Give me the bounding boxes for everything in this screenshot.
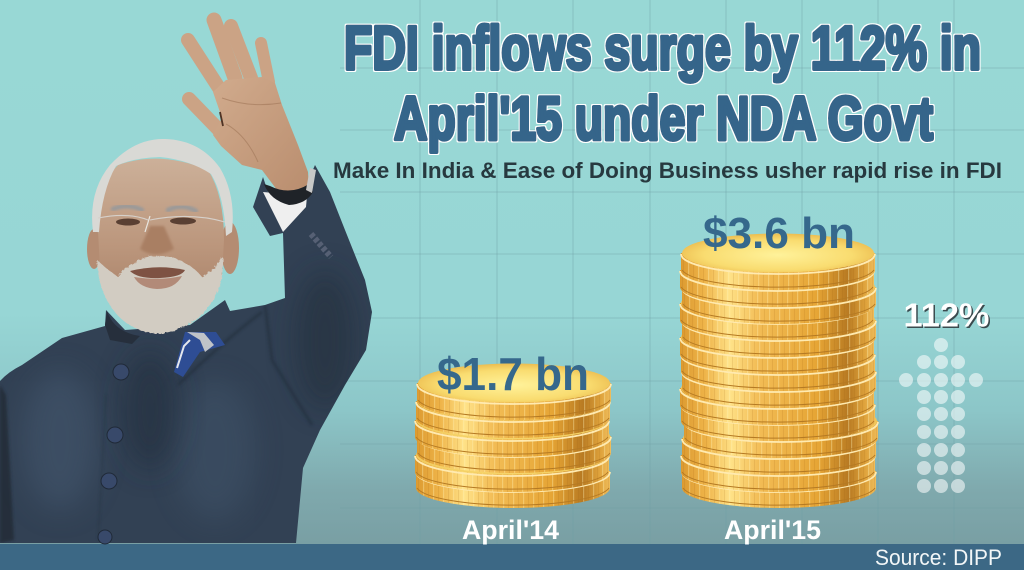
face [98, 159, 224, 320]
icon: dotted up arrow [899, 338, 983, 493]
axis label April'14: April'14 [462, 515, 559, 545]
footer band [0, 544, 1024, 570]
shirt cuff [263, 192, 307, 232]
person: waving leader [0, 20, 372, 544]
growth percentage: 112% [905, 298, 991, 335]
value label 1.7 bn: $1.7 bn [437, 348, 589, 400]
coin stack: April'15 [680, 234, 878, 508]
axis label April'15: April'15 [724, 515, 821, 545]
ears [87, 222, 239, 274]
eyes and brows [98, 206, 225, 232]
subtitle: Make In India & Ease of Doing Business usher rapid rise in FDI [333, 158, 1002, 183]
title [344, 14, 981, 152]
jacket buttons [98, 364, 129, 544]
wrist watch [264, 168, 316, 205]
value label 3.6 bn: $3.6 bn [703, 209, 855, 258]
collar [105, 311, 140, 344]
jacket shading [0, 270, 355, 543]
hand [188, 20, 309, 194]
source text: Source: DIPP [875, 545, 1002, 570]
coin stack: April'14 [415, 364, 611, 508]
hair [92, 139, 233, 236]
beard [97, 256, 223, 334]
nose [140, 226, 174, 254]
mouth [130, 267, 185, 289]
sleeve buttons [311, 234, 331, 257]
growth percentage: 112% [904, 296, 990, 334]
pocket square [174, 332, 225, 377]
jacket [0, 165, 372, 543]
